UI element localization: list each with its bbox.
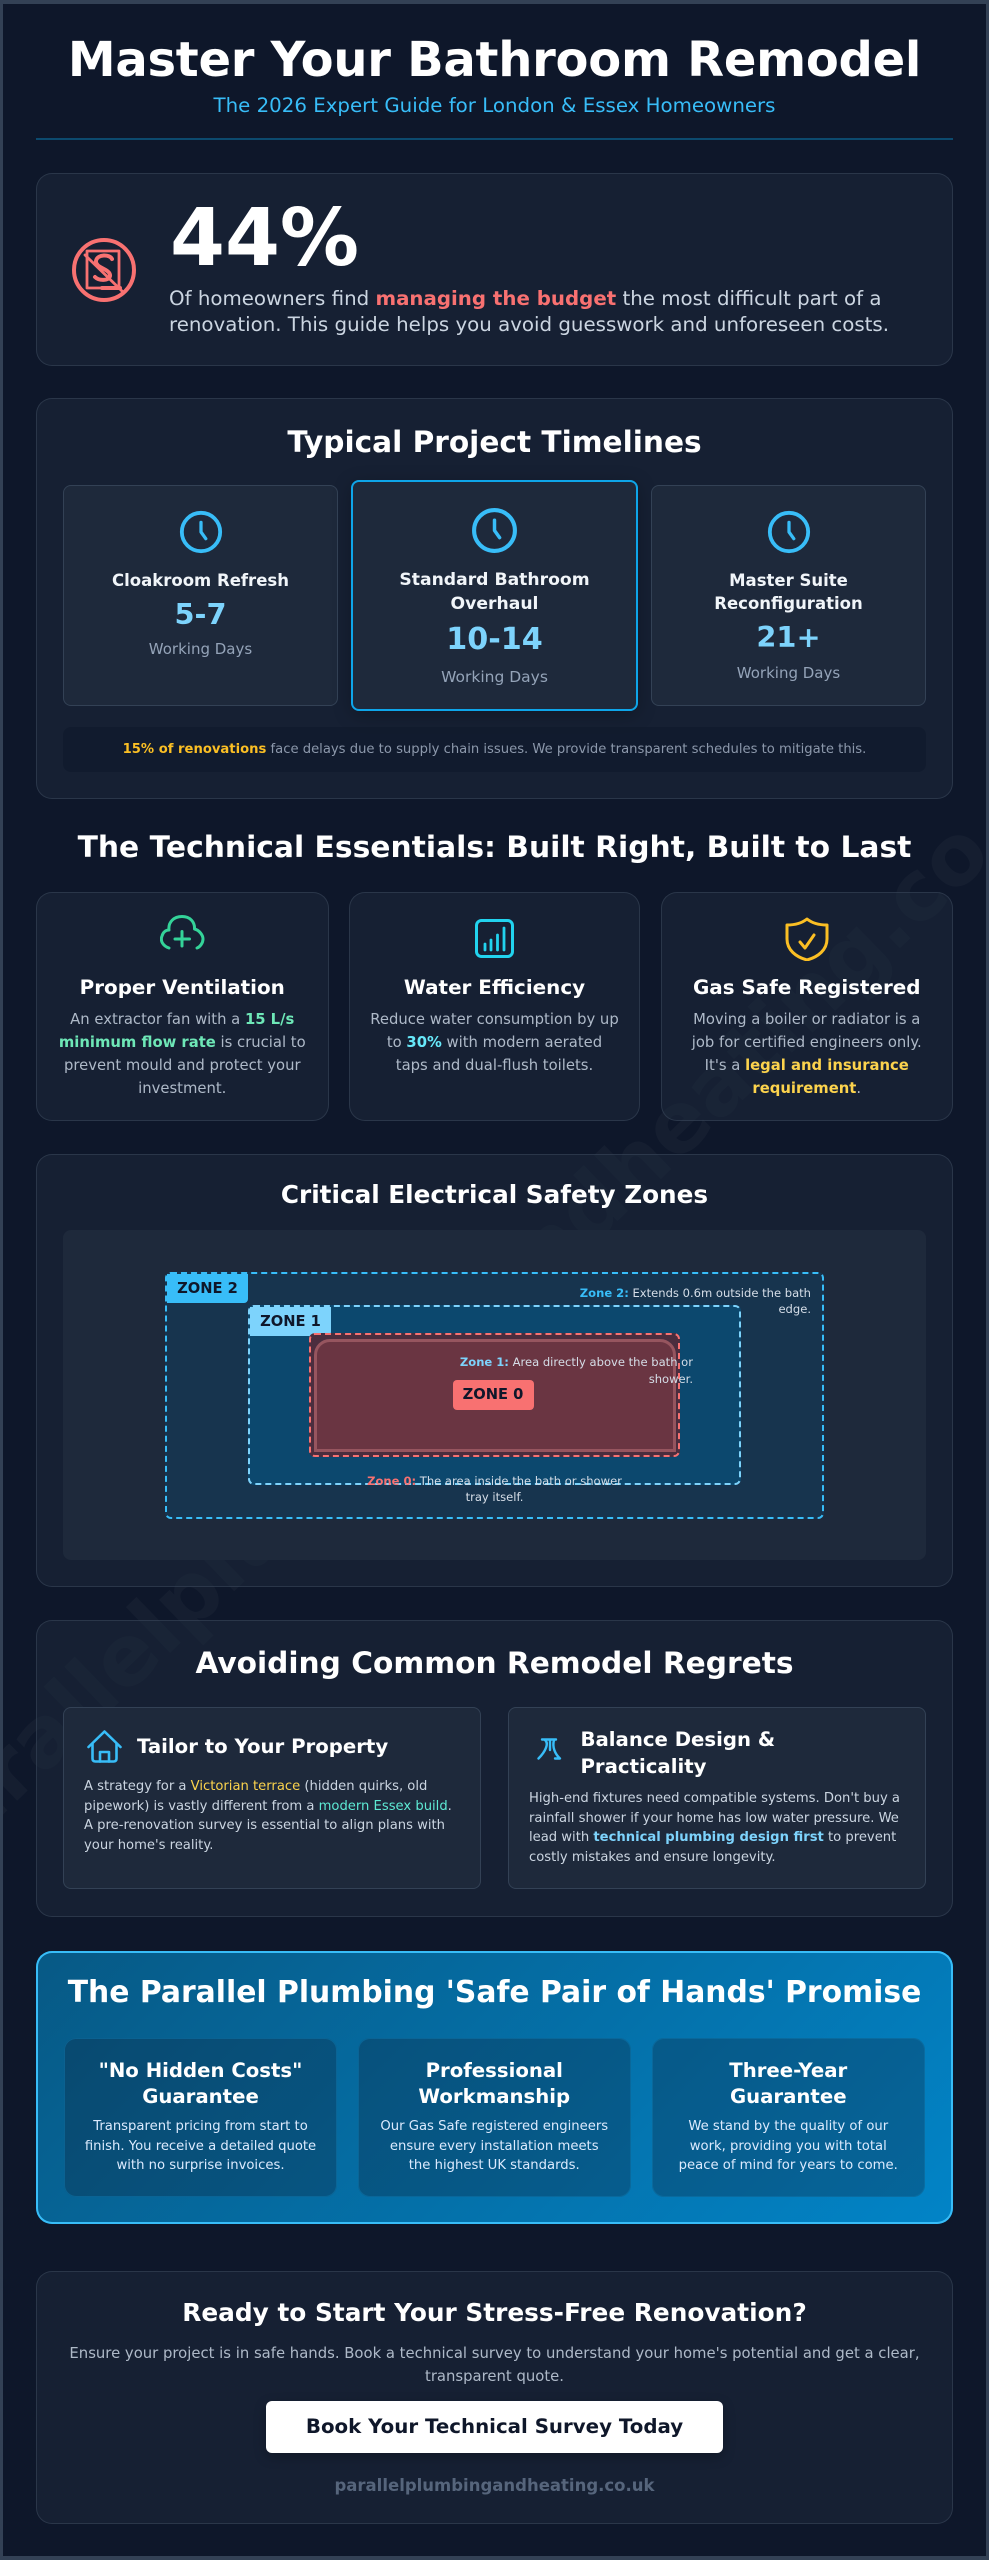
- label: Reconfiguration: [714, 594, 863, 612]
- card: tailor to your property: [63, 1707, 481, 1889]
- card title: Balance Design &: [580, 1728, 775, 1751]
- zone 0: [309, 1333, 680, 1457]
- heading: promise: The Parallel Plumbing 'Safe Pair of Hands' Promise: [68, 1975, 921, 2010]
- panel: common remodel regrets: [36, 1620, 953, 1917]
- card title: Workmanship: [418, 2085, 570, 2108]
- card body: work, providing you with total: [690, 2139, 887, 2154]
- panel: typical project timelines: [36, 398, 953, 799]
- subtitle: The 2026 Expert Guide for London & Essex Homeowners: [214, 94, 775, 117]
- card: standard bathroom overhaul: [351, 480, 638, 711]
- unit: Working Days: [441, 668, 548, 686]
- card body: A strategy for a Victorian terrace (hidden quirks, old: [84, 1779, 427, 1794]
- zone 0 tag: ZONE 0: [463, 1386, 523, 1403]
- heading: ready to start: Ready to Start Your Stress-Free Renovation?: [182, 2298, 807, 2327]
- card title: Tailor to Your Property: [137, 1735, 388, 1758]
- panel: safe pair of hands promise: [36, 1951, 953, 2224]
- card body: An extractor fan with a 15 L/s: [70, 1010, 294, 1028]
- card body: Transparent pricing from start to: [93, 2119, 308, 2134]
- zone 2 note: [580, 1286, 811, 1316]
- label: [399, 570, 590, 614]
- card title: [418, 2059, 570, 2108]
- card: water efficiency: [349, 892, 640, 1121]
- card body: A pre-renovation survey is essential to align plans with: [84, 1818, 445, 1833]
- zone 1: [248, 1305, 741, 1485]
- icon: shield check: [786, 918, 828, 961]
- value: 21+: [756, 620, 821, 654]
- card body: job for certified engineers only.: [692, 1034, 922, 1050]
- icon: cloud plus: [160, 915, 204, 950]
- card body: [529, 1791, 900, 1865]
- card: no hidden costs: [64, 2038, 337, 2197]
- body text: Ensure your project is in safe hands. Book a technical survey to understand your home's potential and get a clear,: [69, 2344, 920, 2362]
- card title: Professional: [426, 2059, 563, 2082]
- zone 1 note: Zone 1: Area directly above the bath or: [460, 1355, 693, 1369]
- value: 5-7: [174, 597, 227, 631]
- card body: It's a legal and insurance: [705, 1056, 909, 1074]
- card body: investment.: [138, 1080, 226, 1096]
- card title: Guarantee: [142, 2085, 259, 2108]
- label: Cloakroom Refresh: [112, 570, 289, 590]
- card title: Practicality: [580, 1755, 706, 1778]
- zone 0 tag: [452, 1380, 534, 1410]
- card body: ensure every installation meets: [390, 2139, 599, 2154]
- zone 0 note: [367, 1474, 622, 1504]
- stat description: [169, 286, 889, 336]
- label: Standard Bathroom: [399, 570, 590, 590]
- card: professional workmanship: [358, 2038, 630, 2197]
- button: book survey: [266, 2401, 723, 2453]
- card title: Three-Year: [729, 2059, 847, 2082]
- card body: [380, 2119, 608, 2173]
- zone 1 note: [460, 1355, 693, 1386]
- icon: shower: [537, 1738, 562, 1760]
- heading: timelines: Typical Project Timelines: [287, 425, 702, 459]
- card body: [692, 1010, 922, 1096]
- card body: the highest UK standards.: [409, 2158, 580, 2173]
- panel: budget statistic: [36, 173, 953, 366]
- zone 1 note: shower.: [649, 1372, 693, 1386]
- diagram backdrop: [63, 1230, 926, 1560]
- card body: finish. You receive a detailed quote: [85, 2139, 316, 2154]
- card body: [84, 1779, 452, 1853]
- big stat 44%: 44%: [170, 192, 359, 284]
- card title: [729, 2059, 848, 2108]
- label: [714, 570, 863, 612]
- icon: clock: [472, 508, 517, 553]
- card body: lead with technical plumbing design first to prevent: [529, 1830, 896, 1845]
- button: book survey: Book Your Technical Survey Today: [306, 2415, 683, 2438]
- title: Master Your Bathroom Remodel: [68, 32, 921, 88]
- panel: call to action: [36, 2271, 953, 2524]
- card title: [580, 1728, 775, 1778]
- zone 2 note: Zone 2: Extends 0.6m outside the bath: [580, 1286, 811, 1300]
- card title: Guarantee: [730, 2085, 847, 2108]
- card title: "No Hidden Costs": [99, 2059, 302, 2082]
- card body: Reduce water consumption by up: [370, 1010, 619, 1028]
- card: gas safe registered: [660, 892, 953, 1121]
- stat description: renovation. This guide helps you avoid guesswork and unforeseen costs.: [169, 313, 889, 336]
- card body: requirement.: [752, 1080, 861, 1096]
- card: cloakroom refresh: [63, 485, 338, 706]
- card body: [679, 2119, 898, 2173]
- heading: zones: Critical Electrical Safety Zones: [281, 1180, 708, 1209]
- zone 2 note: edge.: [778, 1302, 811, 1316]
- zone 2 tag: [167, 1274, 248, 1303]
- zone 1 tag: [250, 1307, 331, 1336]
- body text: transparent quote.: [425, 2368, 564, 2384]
- card body: minimum flow rate is crucial to: [59, 1034, 306, 1050]
- card body: to 30% with modern aerated: [387, 1034, 602, 1050]
- unit: Working Days: [149, 640, 252, 658]
- callout: supply chain delays: [63, 727, 926, 772]
- card: balance design and practicality: [508, 1707, 926, 1889]
- body text: [69, 2344, 920, 2384]
- card title: [99, 2059, 302, 2108]
- label: Overhaul: [451, 594, 538, 614]
- bath outline: [314, 1339, 676, 1452]
- card body: [59, 1010, 306, 1096]
- card body: High-end fixtures need compatible systems. Don't buy a: [529, 1791, 900, 1806]
- icon: house: [87, 1730, 122, 1763]
- header divider: [36, 138, 953, 140]
- card body: We stand by the quality of our: [688, 2119, 888, 2134]
- card title: Gas Safe Registered: [693, 976, 921, 999]
- icon: clock: [768, 510, 810, 554]
- card body: your home's reality.: [84, 1838, 213, 1853]
- card: three-year guarantee: [652, 2038, 924, 2197]
- card: proper ventilation: [36, 892, 328, 1121]
- card body: Moving a boiler or radiator is a: [693, 1010, 920, 1028]
- zone 0 note: tray itself.: [466, 1490, 523, 1504]
- card body: [85, 2119, 316, 2173]
- heading: regrets: Avoiding Common Remodel Regrets: [195, 1645, 794, 1680]
- label: Master Suite: [729, 570, 848, 590]
- card body: [370, 1010, 619, 1074]
- card body: with no surprise invoices.: [116, 2158, 285, 2173]
- card body: Our Gas Safe registered engineers: [380, 2119, 608, 2134]
- icon: bar gauge: [475, 919, 514, 958]
- card body: pipework) is vastly different from a modern Essex build.: [84, 1799, 452, 1814]
- card: master suite reconfiguration: [651, 485, 926, 706]
- icon: clock: [180, 510, 222, 554]
- card title: Proper Ventilation: [80, 976, 285, 999]
- card body: taps and dual-flush toilets.: [396, 1056, 593, 1074]
- zone 2: [165, 1272, 824, 1519]
- zone 0 note: Zone 0: The area inside the bath or shower: [367, 1474, 622, 1488]
- card body: rainfall shower if your home has low water pressure. We: [529, 1811, 899, 1826]
- zone 2 tag: ZONE 2: [177, 1280, 238, 1297]
- card body: costly mistakes and ensure longevity.: [529, 1850, 776, 1865]
- value: 10-14: [446, 622, 543, 657]
- callout: supply chain delays: 15% of renovations face delays due to supply chain issues. We provide transparent schedules to mitigate this.: [123, 742, 866, 757]
- card title: Water Efficiency: [404, 976, 585, 999]
- icon: crossed-out budget: [72, 238, 136, 302]
- zone 1 tag: ZONE 1: [260, 1313, 321, 1330]
- unit: Working Days: [737, 664, 840, 682]
- website url: parallelplumbingandheating.co.uk: [334, 2476, 655, 2495]
- card body: peace of mind for years to come.: [679, 2158, 898, 2173]
- card body: prevent mould and protect your: [64, 1056, 301, 1074]
- panel: electrical safety zones: [36, 1154, 953, 1587]
- heading: technical essentials: The Technical Essentials: Built Right, Built to Last: [78, 830, 911, 865]
- stat description: Of homeowners find managing the budget the most difficult part of a: [169, 286, 881, 310]
